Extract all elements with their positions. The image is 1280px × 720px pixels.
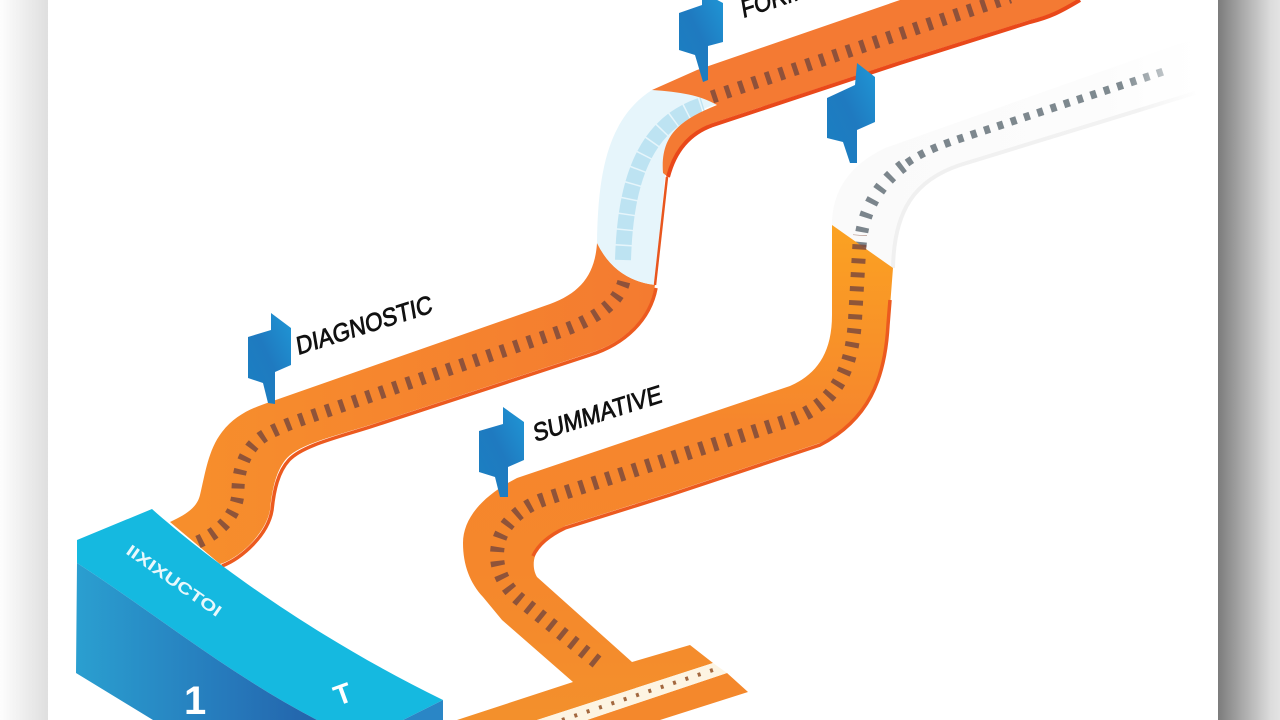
pin: formative <box>679 0 723 82</box>
junction light stripe <box>537 663 727 720</box>
road: summative branch with junction <box>457 225 893 720</box>
block number mark: T <box>329 677 356 712</box>
faded future road segment <box>832 40 1200 268</box>
road: formative segment <box>652 0 1080 177</box>
summative red lower edge <box>533 300 890 556</box>
road: diagnostic segment <box>170 243 656 566</box>
label: summative: SUMMATIVE <box>531 380 664 448</box>
pin: upcoming stage <box>827 63 875 163</box>
formative red lower edge <box>668 0 1080 177</box>
translucent road section <box>597 90 717 285</box>
block right face <box>403 700 443 720</box>
block front face <box>76 563 317 720</box>
formative ticks <box>712 0 1010 97</box>
stripe ticks <box>562 667 722 720</box>
label: diagnostic: DIAGNOSTIC <box>294 290 434 361</box>
summative ticks <box>497 235 860 662</box>
pin: diagnostic <box>248 313 291 404</box>
diagnostic red lower edge <box>222 288 656 566</box>
diagnostic ticks <box>198 275 625 542</box>
block top face <box>77 509 443 720</box>
block label: IIXIXUCTOI <box>123 542 224 621</box>
lower junction bar <box>587 673 748 720</box>
starting block <box>76 509 443 720</box>
pin: summative <box>479 407 524 497</box>
